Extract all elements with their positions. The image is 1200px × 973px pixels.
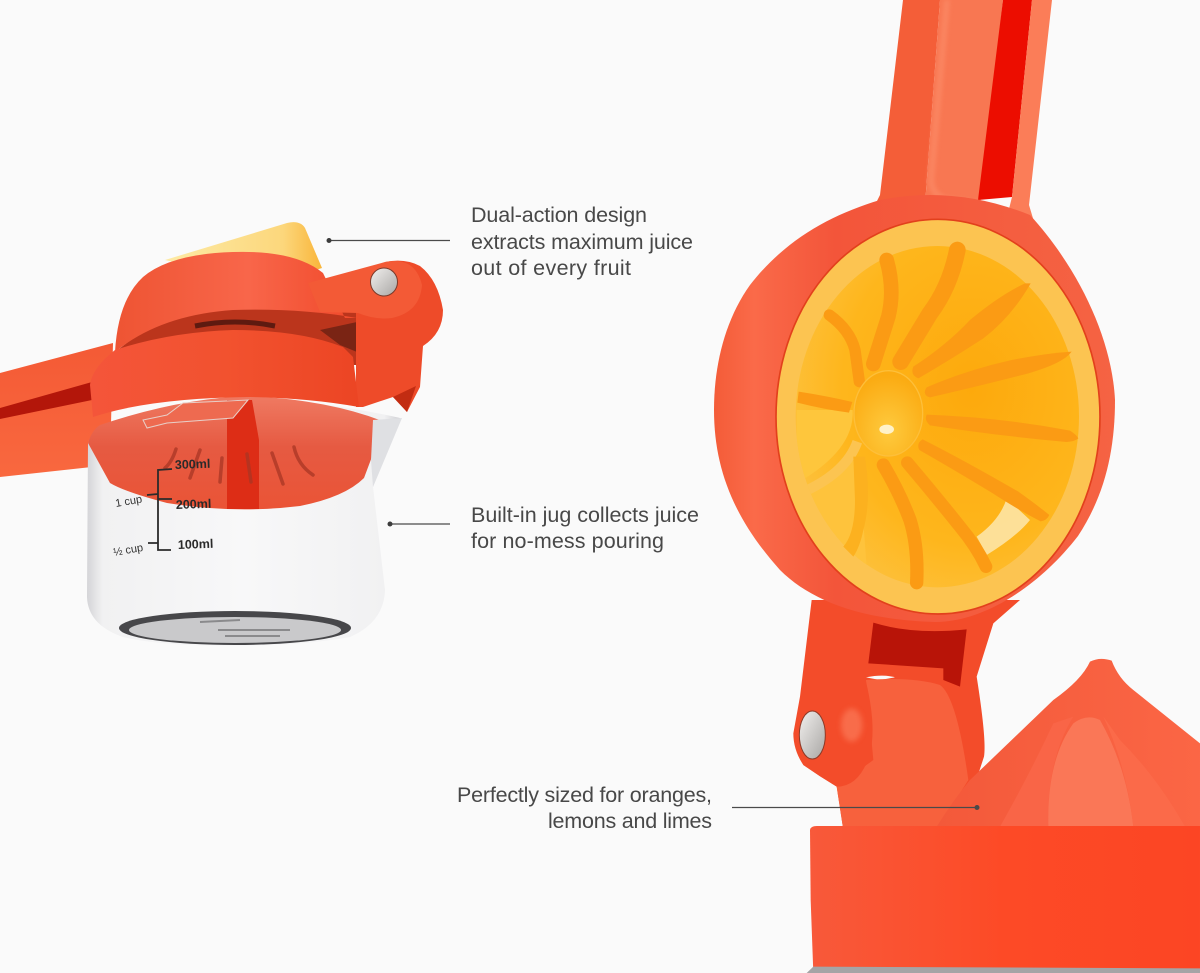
grey body under lid xyxy=(807,967,1200,973)
lighter rib xyxy=(843,457,868,557)
measurement scale xyxy=(112,457,214,559)
hinge dark notch xyxy=(393,386,416,412)
lever arm xyxy=(308,261,422,318)
juicer collar ring xyxy=(90,330,359,417)
lower bracket and hinge (zoom coordinates) xyxy=(793,600,1020,830)
round head outer shell xyxy=(714,195,1115,622)
swivel block xyxy=(837,679,968,830)
measurement scale: 100ml xyxy=(178,537,214,552)
handle window moulded in jug rim xyxy=(143,400,248,428)
leader line xyxy=(732,805,980,810)
cone ridge facet xyxy=(1103,717,1185,827)
bracket window xyxy=(868,623,967,687)
reamer cone (zoom coordinates) xyxy=(807,659,1200,973)
rounded curved ribs xyxy=(829,250,986,583)
hinge pin xyxy=(799,711,825,759)
white sliver behind swivel xyxy=(866,676,895,680)
callout: dual-action design xyxy=(326,203,693,280)
measurement scale: 1 cup xyxy=(114,493,143,510)
callout text: Dual-action design xyxy=(471,203,647,227)
upper handle xyxy=(875,0,1052,225)
measurement scale: 200ml xyxy=(176,497,212,512)
juicer handle (left) xyxy=(0,343,113,477)
red press bowl inside jug xyxy=(88,396,385,509)
product: juicer front view xyxy=(714,0,1200,973)
press ribs seen through jug xyxy=(165,447,313,484)
cone side facet xyxy=(1000,717,1073,827)
juicer dome cap xyxy=(115,252,357,352)
barrel highlight xyxy=(841,708,862,742)
measurement scale: 300ml xyxy=(175,457,211,472)
lid top edge and wall xyxy=(810,826,1200,973)
lower left bowl sectors xyxy=(799,410,866,554)
callout text: for no-mess pouring xyxy=(471,529,664,553)
callout text: extracts maximum juice xyxy=(471,230,693,254)
callout text: Perfectly sized for oranges, xyxy=(457,783,712,807)
callout: built-in jug xyxy=(388,503,699,553)
cone facet xyxy=(1048,717,1133,827)
gap below dome xyxy=(115,302,358,365)
glass jug xyxy=(87,396,402,646)
spout xyxy=(371,418,402,487)
jug base xyxy=(119,611,351,645)
cup glint xyxy=(879,425,894,434)
pin barrel xyxy=(800,682,873,787)
callout text: out of every fruit xyxy=(471,256,631,280)
centre reamer cup xyxy=(854,371,923,456)
head (zoom coordinates) xyxy=(776,219,1100,614)
yellow ring xyxy=(776,219,1100,614)
yellow press plate wedge xyxy=(165,222,322,275)
callout text: lemons and limes xyxy=(548,809,712,833)
product: juicer side view with jug xyxy=(0,222,443,646)
hinge pin xyxy=(370,268,398,296)
bowl highlight xyxy=(977,498,1030,555)
recessed bowl xyxy=(796,246,1079,587)
measurement scale: ½ cup xyxy=(112,542,144,559)
cone body xyxy=(937,659,1200,827)
callout text: Built-in jug collects juice xyxy=(471,503,699,527)
bracket body xyxy=(793,600,1020,830)
lever body xyxy=(356,261,443,412)
leader line xyxy=(326,238,450,243)
tapered straight ribs xyxy=(797,283,1078,521)
leader line xyxy=(388,522,450,526)
vertical red seam xyxy=(227,400,259,509)
callout: perfectly sized xyxy=(457,783,980,833)
